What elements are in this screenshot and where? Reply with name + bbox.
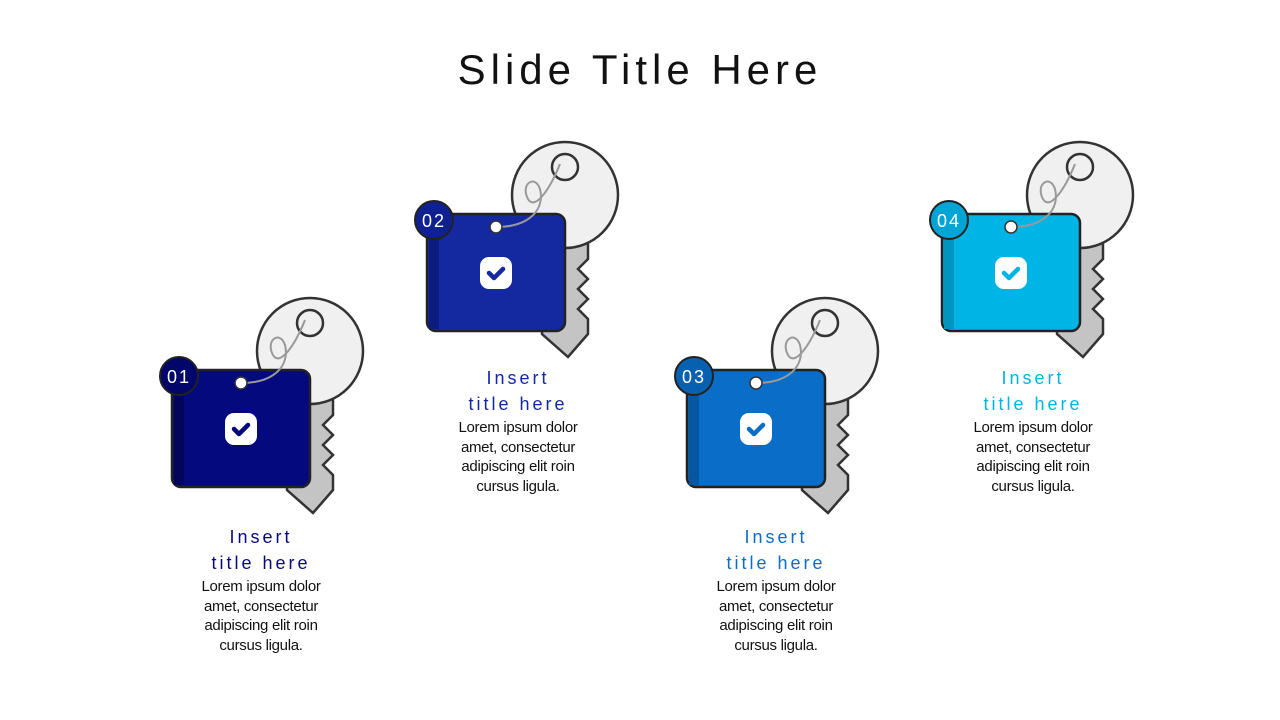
caption 04: amet, consectetur: [976, 438, 1090, 456]
caption 02: title here: [468, 394, 568, 414]
key 03: [675, 298, 878, 513]
caption 02: cursus ligula.: [476, 478, 560, 494]
caption 03: title here: [726, 553, 826, 573]
caption 01: amet, consectetur: [204, 598, 318, 614]
caption 01: title here: [211, 553, 311, 573]
key 04: [930, 142, 1133, 357]
key 01: [160, 298, 363, 513]
caption 01: Lorem ipsum dolor: [201, 578, 321, 595]
caption 03: Insert: [744, 527, 808, 547]
caption 02: amet, consectetur: [461, 438, 575, 456]
caption 02: [458, 368, 578, 494]
caption 02: Lorem ipsum dolor: [458, 419, 578, 436]
caption 04: title here: [983, 394, 1083, 414]
caption 01: cursus ligula.: [219, 636, 303, 654]
caption 04: adipiscing elit roin: [976, 458, 1090, 475]
key 03: 03: [682, 367, 706, 387]
caption 03: adipiscing elit roin: [719, 617, 833, 634]
caption 04: Insert: [1001, 368, 1065, 388]
caption 03: amet, consectetur: [719, 598, 833, 614]
caption 01: [201, 527, 321, 654]
caption 03: cursus ligula.: [734, 636, 818, 654]
caption 02: Insert: [486, 368, 550, 388]
caption 03: Lorem ipsum dolor: [716, 578, 836, 595]
caption 01: adipiscing elit roin: [204, 617, 318, 634]
caption 03: [716, 527, 836, 654]
key 04: 04: [937, 211, 961, 231]
key 02: 02: [422, 211, 446, 231]
caption 02: adipiscing elit roin: [461, 458, 575, 475]
key 01: 01: [167, 367, 191, 387]
caption 04: Lorem ipsum dolor: [973, 419, 1093, 436]
caption 04: cursus ligula.: [991, 478, 1075, 494]
caption 01: Insert: [229, 527, 293, 547]
caption 04: [973, 368, 1093, 494]
title: Slide Title Here: [458, 46, 822, 93]
key 02: [415, 142, 618, 357]
